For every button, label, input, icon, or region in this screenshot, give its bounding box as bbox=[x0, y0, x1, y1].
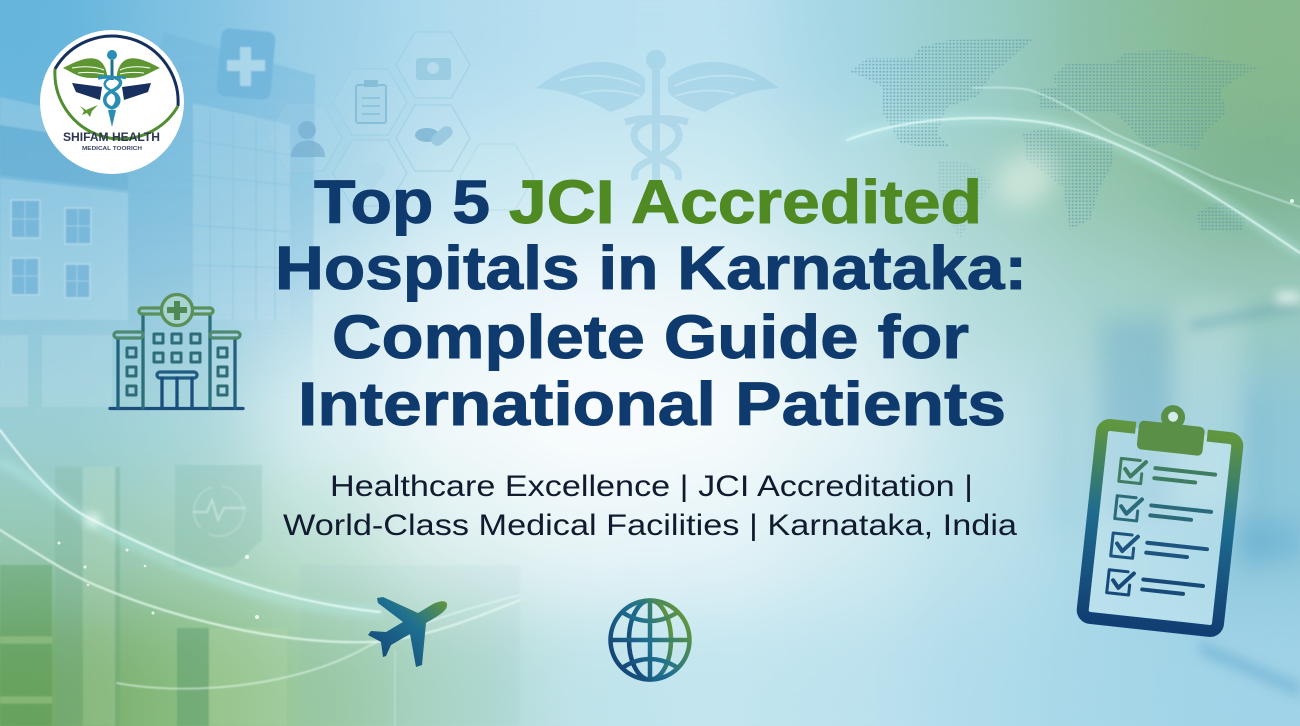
logo text: SHIFAM HEALTH bbox=[63, 132, 160, 144]
title: Top 5 JCI Accredited bbox=[314, 168, 982, 236]
logo badge bbox=[40, 30, 184, 174]
checklist row 2 bbox=[1115, 496, 1212, 529]
faded caduceus watermark bbox=[536, 50, 779, 180]
faded hexagon medical icons bbox=[268, 32, 534, 210]
subtitle: Healthcare Excellence | JCI Accreditation | bbox=[330, 470, 973, 503]
icon: globe bbox=[610, 600, 690, 680]
icon: airplane bbox=[368, 597, 447, 667]
title: International Patients bbox=[298, 370, 1006, 438]
checklist row 3 bbox=[1111, 533, 1208, 566]
subtitle: World-Class Medical Facilities | Karnataka, India bbox=[283, 509, 1017, 542]
logo badge: MEDICAL TOORICH bbox=[82, 146, 142, 152]
dotted world map bbox=[850, 39, 1260, 240]
faded hospital building, upper left bbox=[0, 28, 315, 407]
logo emblem bbox=[63, 50, 160, 127]
blurred corridor, right bbox=[984, 140, 1300, 698]
title bbox=[275, 168, 1027, 438]
icon: clipboard checklist bbox=[1082, 398, 1241, 632]
faded building, lower left bbox=[0, 465, 520, 726]
icon: hospital bbox=[110, 294, 243, 408]
title: Hospitals in Karnataka: bbox=[275, 234, 1027, 302]
title: Complete Guide for bbox=[332, 303, 969, 371]
subtitle bbox=[283, 470, 1017, 542]
checklist row 1 bbox=[1119, 458, 1216, 492]
checklist row 4 bbox=[1107, 570, 1204, 603]
